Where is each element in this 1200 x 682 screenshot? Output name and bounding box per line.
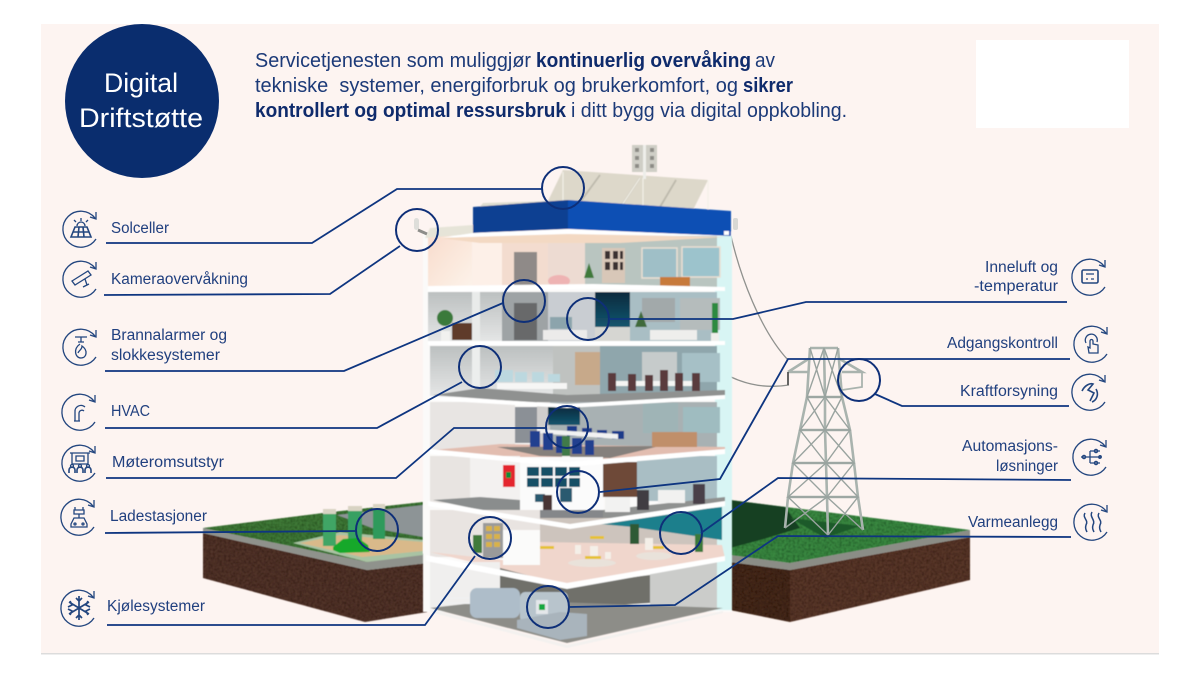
- icon: fire sprinkler: [63, 329, 96, 365]
- label Varmeanlegg: Varmeanlegg: [968, 514, 1058, 531]
- intro text: Servicetjenesten som muliggjør: [255, 50, 531, 72]
- floor slabs: [426, 284, 725, 589]
- callout Kraftforsyning: [838, 359, 1069, 406]
- intro text: av: [755, 50, 775, 72]
- label Kjølesystemer: Kjølesystemer: [107, 598, 205, 615]
- floor 3: [430, 346, 725, 405]
- label Møteromsutstyr: Møteromsutstyr: [112, 454, 224, 471]
- label Kraftforsyning: Kraftforsyning: [960, 383, 1058, 400]
- icon: HVAC duct: [62, 394, 95, 430]
- callout Brannalarmer: [105, 280, 545, 371]
- security camera: [414, 218, 738, 234]
- top floor: [428, 236, 720, 289]
- icon: solar cells: [63, 211, 96, 247]
- basement with technical plant: [430, 560, 723, 648]
- label Brannalarmer og slokkesystemer: Brannalarmer og: [111, 327, 227, 344]
- label Solceller: Solceller: [111, 220, 169, 237]
- label Inneluft og -temperatur: [974, 259, 1058, 295]
- icon: heating: [1074, 504, 1107, 540]
- floor 6 lobby: [430, 507, 725, 585]
- label Kameraovervåkning: Kameraovervåkning: [111, 271, 248, 288]
- callout Inneluft: [567, 298, 1067, 340]
- callout Solceller: [106, 167, 584, 243]
- floor 2: [428, 292, 720, 343]
- callout Kameraovervåkning: [104, 209, 438, 295]
- intro text: tekniske systemer, energiforbruk og brukerkomfort, og: [255, 75, 738, 97]
- callout Ladestasjoner: [105, 509, 398, 551]
- intro text: [255, 49, 847, 122]
- label HVAC: HVAC: [111, 403, 150, 420]
- ground block left with charging stations: [203, 502, 427, 622]
- icon: indoor climate: [1072, 259, 1105, 295]
- power tower: [785, 348, 863, 535]
- callout Møteromsutstyr: [106, 406, 588, 478]
- label Brannalarmer og slokkesystemer: slokkesystemer: [111, 347, 220, 364]
- label Inneluft og -temperatur: Inneluft og: [985, 259, 1058, 276]
- icon: meeting room: [62, 445, 95, 481]
- label Brannalarmer og slokkesystemer: [111, 327, 227, 364]
- icon: camera: [63, 261, 96, 297]
- intro text: kontrollert og optimal ressursbruk: [255, 100, 567, 122]
- callout Kjølesystemer: [107, 517, 511, 625]
- blue roof edge: [425, 200, 731, 243]
- callout Varmeanlegg: [527, 536, 1071, 628]
- label Ladestasjoner: Ladestasjoner: [110, 508, 207, 525]
- rooftop solar panels and turbine: [473, 145, 708, 215]
- logo placeholder: [976, 40, 1129, 128]
- label Adgangskontroll: Adgangskontroll: [947, 335, 1058, 352]
- power cables: [731, 236, 789, 386]
- floor 5 control room: [430, 456, 725, 525]
- label Automasjonsløsninger: [962, 438, 1058, 475]
- title badge: Driftstøtte: [79, 103, 203, 133]
- intro text: kontinuerlig overvåking: [536, 49, 751, 72]
- building: [423, 145, 732, 648]
- icon: automation: [1073, 439, 1106, 475]
- floor 4 meeting room: [430, 402, 725, 463]
- icon: power supply: [1072, 374, 1105, 410]
- label Inneluft og -temperatur: -temperatur: [974, 278, 1058, 295]
- title badge: Digital: [104, 68, 178, 98]
- icon: snowflake: [61, 590, 94, 626]
- callout Adgangskontroll: [557, 359, 1070, 513]
- intro text: i ditt bygg via digital oppkobling.: [571, 100, 847, 122]
- callout HVAC: [105, 346, 501, 428]
- label Automasjonsløsninger: Automasjons-: [962, 438, 1058, 455]
- title badge: [65, 24, 219, 178]
- intro text: sikrer: [743, 75, 793, 97]
- callout Automasjonsløsninger: [660, 478, 1071, 554]
- ground block right: [730, 500, 970, 622]
- icon: charging car: [61, 499, 94, 535]
- label Automasjonsløsninger: løsninger: [996, 458, 1058, 475]
- icon: access control: [1074, 326, 1107, 362]
